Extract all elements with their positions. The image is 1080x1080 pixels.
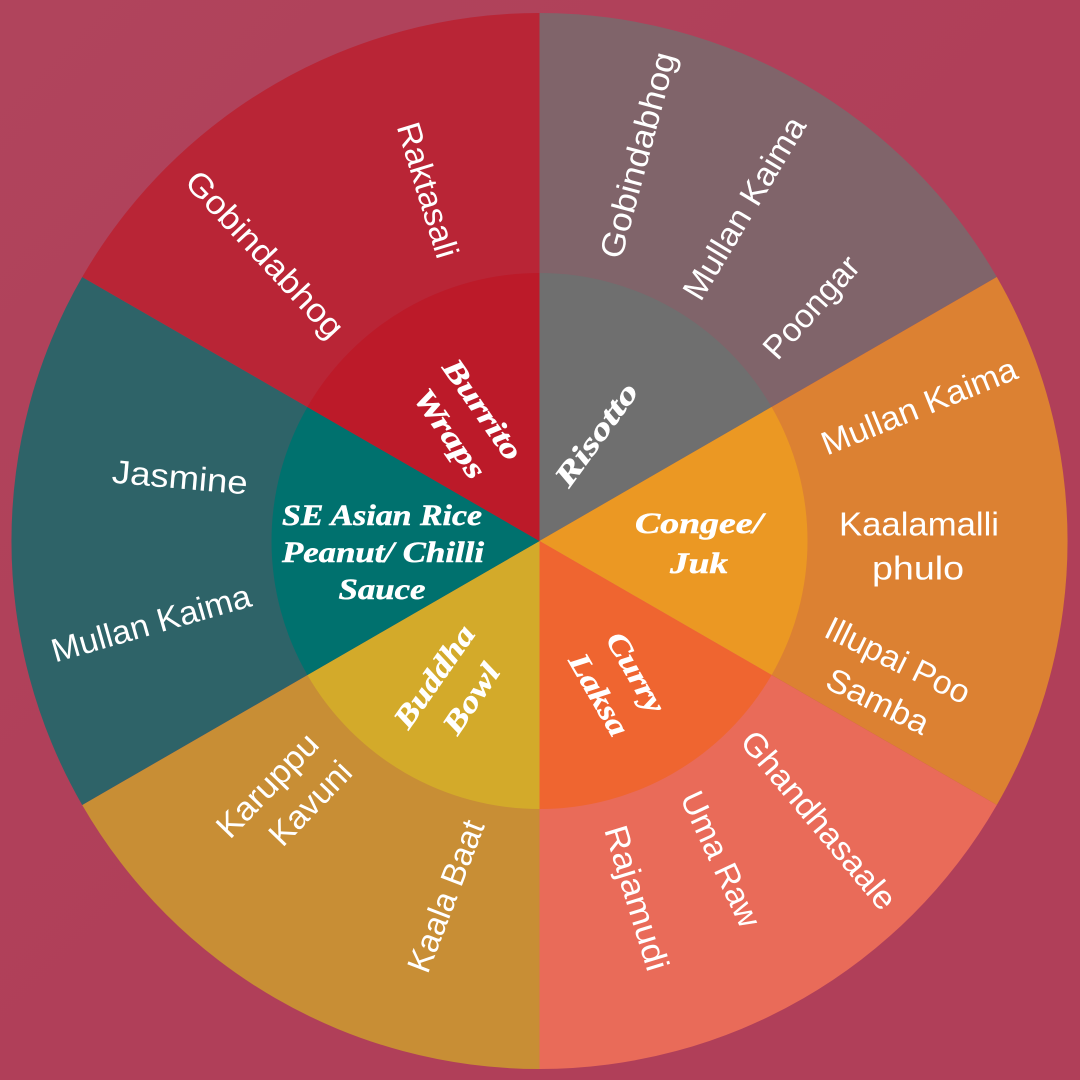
outer wedge: Risotto (540, 13, 997, 541)
inner wedge: Risotto (540, 273, 772, 541)
variety: Karuppu Kavuni: Karuppu (208, 725, 326, 845)
variety: Poongar: Poongar (755, 248, 867, 366)
dish label: Burrito Wraps: Wraps (406, 382, 492, 485)
segment: Curry Laksa (540, 541, 997, 1069)
variety: Mullan Kaima: Mullan Kaima (675, 109, 814, 306)
dish label: Buddha Bowl: Buddha (387, 619, 482, 735)
segment: Burrito Wraps (82, 13, 539, 541)
variety: Mullan Kaima: Mullan Kaima (816, 350, 1023, 462)
dish label: Congee/ Juk: Congee/ (635, 507, 766, 540)
dish label: Congee/ Juk: Juk (669, 547, 728, 580)
variety: Kaalamalli phulo: phulo (872, 550, 964, 587)
dish label: Buddha Bowl (387, 619, 508, 741)
dish label: SE Asian Rice Peanut/ Chilli Sauce (281, 499, 485, 606)
outer wedge: Buddha Bowl (82, 541, 539, 1069)
variety: Karuppu Kavuni: Kavuni (261, 753, 359, 853)
inner wedge: Curry Laksa (540, 541, 772, 809)
segment: SE Asian Rice Peanut/Chilli Sauce (11, 277, 540, 805)
dish label: SE Asian Rice Peanut/ Chilli Sauce: Peanut/ Chilli (281, 536, 485, 569)
variety: Kaalamalli phulo: Kaalamalli (839, 506, 999, 543)
variety: Kaala Baat: Kaala Baat (400, 815, 491, 977)
inner wedge: Burrito Wraps (307, 273, 540, 541)
segment: Buddha Bowl (82, 541, 539, 1069)
dish label: Curry Laksa (561, 626, 672, 742)
segment: Congee/Juk (540, 277, 1068, 805)
outer wedge: Curry Laksa (540, 541, 997, 1069)
dish label: Risotto: Risotto (547, 376, 645, 494)
variety: Illupai Poo Samba: Illupai Poo (819, 609, 977, 711)
variety: Kaalamalli phulo (839, 506, 999, 587)
dish label: Congee/ Juk (635, 507, 766, 580)
segment: Risotto (540, 13, 997, 541)
outer wedge: Burrito Wraps (82, 13, 539, 541)
variety: Raktasali: Raktasali (390, 118, 466, 262)
variety: Karuppu Kavuni (208, 725, 359, 853)
dish label: Burrito Wraps: Burrito (435, 352, 529, 467)
variety: Gobindabhog: Gobindabhog (178, 163, 352, 345)
variety: Mullan Kaima: Mullan Kaima (47, 577, 256, 669)
inner wedge: Congee (540, 407, 808, 675)
dish label: Burrito Wraps (406, 352, 529, 485)
dish label: Curry Laksa: Curry (599, 626, 672, 720)
inner wedge: Buddha Bowl (307, 541, 540, 809)
dish label: SE Asian Rice Peanut/ Chilli Sauce: Sauce (338, 573, 426, 606)
outer wedge: SE Asian (11, 277, 540, 805)
dish label: Buddha Bowl: Bowl (435, 656, 508, 741)
dish label: SE Asian Rice Peanut/ Chilli Sauce: SE Asian Rice (282, 499, 482, 532)
dish label: Curry Laksa: Laksa (561, 646, 635, 742)
variety: Rajamudi: Rajamudi (597, 821, 677, 975)
variety: Jasmine: Jasmine (111, 453, 249, 501)
variety: Illupai Poo Samba: Samba (820, 660, 936, 742)
variety: Gobindabhog: Gobindabhog (592, 48, 683, 262)
inner wedge: SE Asian (271, 407, 540, 675)
variety: Ghandhasaale: Ghandhasaale (733, 723, 904, 917)
variety: Uma Raw: Uma Raw (673, 785, 769, 933)
outer wedge: Congee (540, 277, 1068, 805)
